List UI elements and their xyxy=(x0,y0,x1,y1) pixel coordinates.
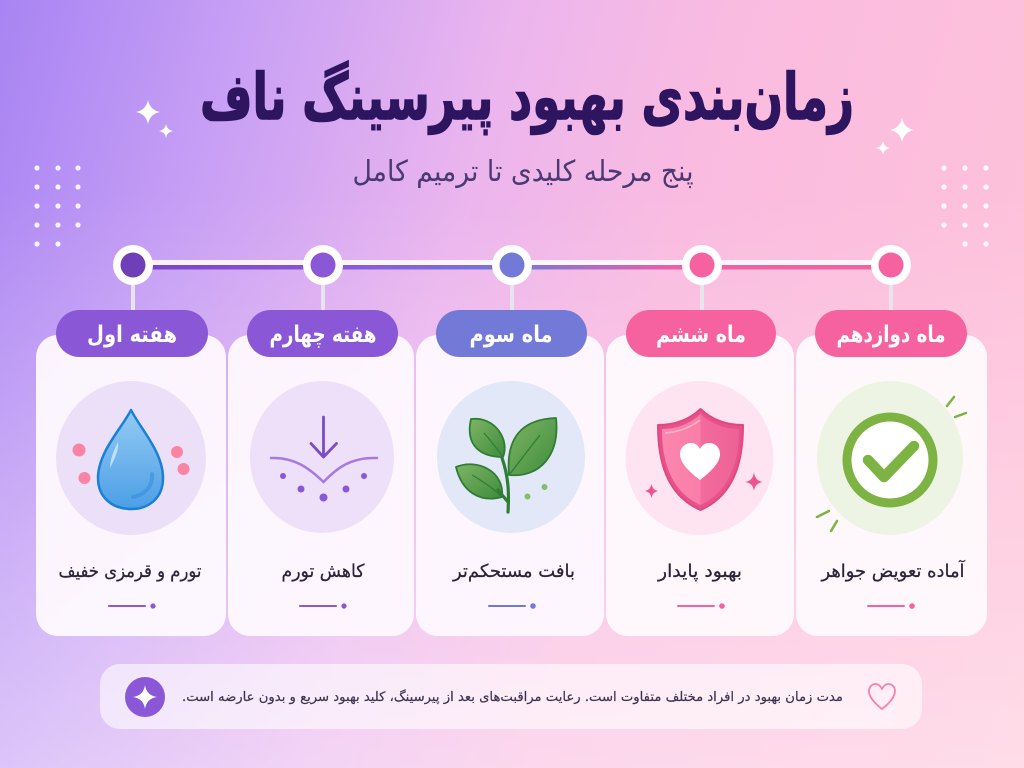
badge: month three: ماه سوم xyxy=(470,322,552,348)
badge: month six: ماه ششم xyxy=(656,322,746,348)
label: lasting recovery: بهبود پایدار xyxy=(657,561,742,582)
panel: week one xyxy=(36,310,226,636)
divider mark xyxy=(867,603,915,609)
divider mark xyxy=(677,603,725,609)
divider mark xyxy=(488,603,536,609)
badge: month three xyxy=(436,310,587,357)
divider mark xyxy=(108,603,156,609)
badge: week one xyxy=(56,310,208,357)
icon: leaves xyxy=(437,381,585,533)
dot grid: right xyxy=(941,165,989,247)
icon: water drop xyxy=(56,381,206,535)
badge: week one: هفته اول xyxy=(87,322,177,348)
dot grid: left xyxy=(34,165,81,247)
badge: month twelve: ماه دوازدهم xyxy=(836,322,946,348)
icon: check mark xyxy=(817,381,966,535)
label: reduced swelling: کاهش تورم xyxy=(282,561,365,582)
icon: heart outline xyxy=(869,684,895,709)
note text: مدت زمان بهبود در افراد مختلف متفاوت است. رعایت مراقبت‌های بعد از پیرسینگ، کلید بهبود سریع و بدون عارضه است. xyxy=(182,689,843,705)
panel: month three xyxy=(416,310,604,636)
icon: reduced swelling arrow xyxy=(250,381,394,533)
panel: week four xyxy=(228,310,414,636)
sparkles: top left xyxy=(136,100,173,138)
icon: shield with heart xyxy=(626,381,774,535)
callout: footer note xyxy=(100,664,922,729)
badge: week four: هفته چهارم xyxy=(270,322,376,348)
badge: month six xyxy=(626,310,776,357)
subtitle: پنج مرحله کلیدی تا ترمیم کامل xyxy=(352,154,694,189)
label: ready for jewelry change: آماده تعویض جواهر xyxy=(821,559,965,582)
label: mild swelling and redness: تورم و قرمزی خفیف xyxy=(58,561,202,582)
timeline xyxy=(113,245,911,314)
divider mark xyxy=(299,603,347,609)
sparkles: top right xyxy=(876,118,914,155)
badge: week four xyxy=(247,310,398,357)
panel: month six xyxy=(606,310,794,636)
panel: month twelve xyxy=(796,310,987,636)
badge: month twelve xyxy=(815,310,967,357)
label: stronger tissue: بافت مستحکم‌تر xyxy=(452,561,575,582)
icon: star badge xyxy=(125,677,165,717)
